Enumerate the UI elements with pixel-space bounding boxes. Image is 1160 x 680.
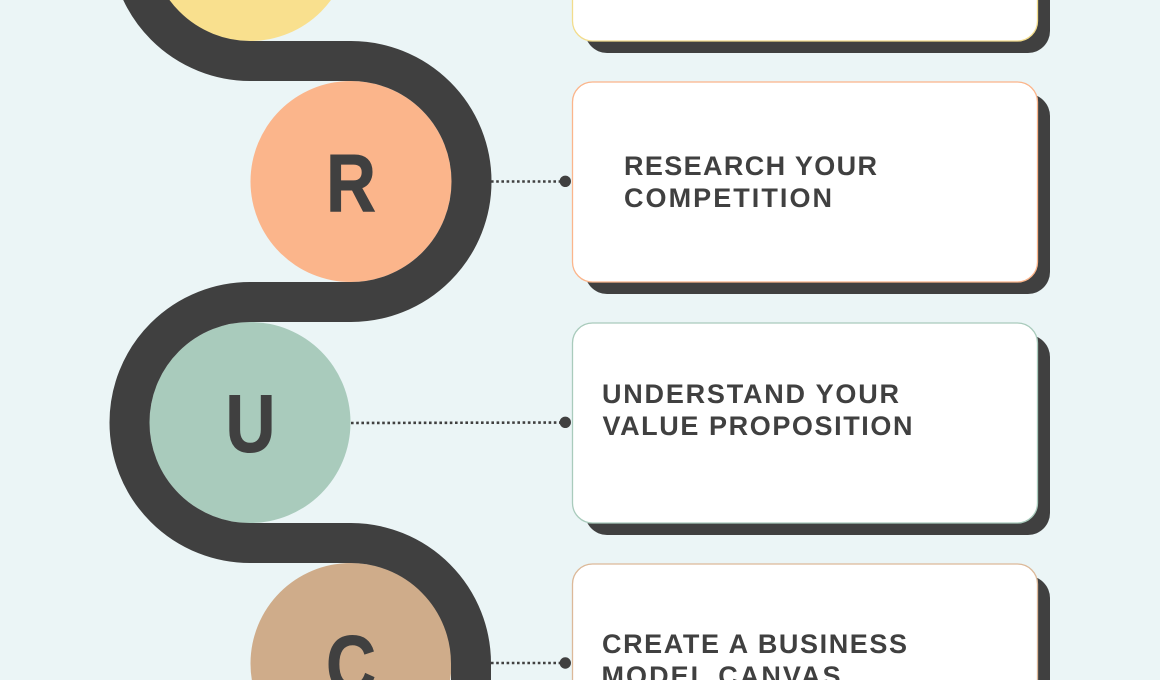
card: research [572,82,1050,294]
card: business model canvas [572,564,1050,680]
card: value proposition: VALUE PROPOSITION [602,411,912,441]
circle C [250,563,452,680]
winding path [130,0,472,680]
card: research: RESEARCH YOUR [624,151,877,181]
circle U [150,322,350,523]
connector U [351,417,571,428]
circle R: R [326,138,376,230]
circle U: U [226,378,275,470]
connector C [491,657,571,669]
card: research: COMPETITION [624,183,832,213]
connector R [491,176,571,187]
card: value proposition [572,323,1050,535]
circle R [250,81,452,282]
card: value proposition: UNDERSTAND YOUR [602,379,899,409]
card: business model canvas: CREATE A BUSINESS [602,629,907,659]
card: top partial [572,0,1050,53]
circle: yellow [150,0,350,41]
